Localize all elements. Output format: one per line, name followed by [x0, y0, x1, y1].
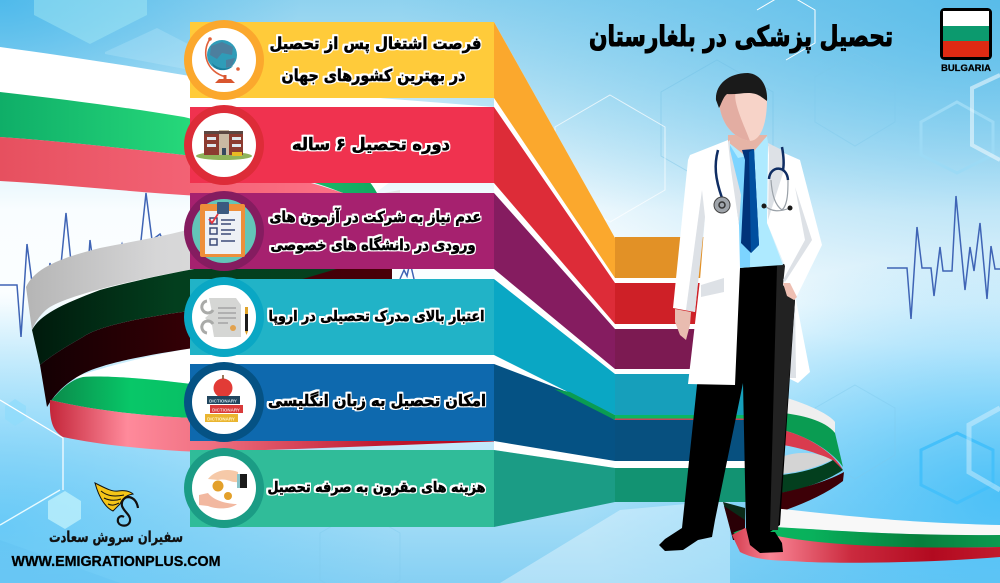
banner 5: English-language study: [184, 362, 750, 461]
icon: clipboard: [200, 202, 245, 257]
title: تحصیل پزشکی در بلغارستان: [589, 20, 893, 53]
label 4: اعتبار بالای مدرک تحصیلی در اروپا: [268, 309, 484, 325]
banner 2: six-year course: [184, 105, 750, 324]
trousers: [659, 264, 797, 553]
label 1: در بهترین کشورهای جهان: [282, 66, 466, 86]
tie: [741, 149, 759, 253]
doctor figure: [659, 73, 822, 553]
icon: certificate and pen: [202, 298, 248, 337]
label 5: امکان تحصیل به زبان انگلیسی: [268, 391, 486, 410]
banner 4: degree validity: [184, 277, 750, 415]
head: [716, 73, 768, 165]
hands: [675, 309, 691, 340]
label 6: هزینه های مقرون به صرفه تحصیل: [268, 480, 486, 496]
icon: hands and coins: [199, 470, 247, 508]
flag ribbon: right loop: [723, 398, 1000, 563]
white backing behind 3D banner sides: [494, 22, 752, 468]
white coat: [673, 140, 822, 385]
label 2: دوره تحصیل ۶ ساله: [292, 135, 450, 155]
flag caption: BULGARIA: [941, 63, 991, 74]
logo wordmark: سفیران سروش سعادت: [49, 528, 183, 546]
website address: WWW.EMIGRATIONPLUS.COM: [12, 553, 220, 570]
icon: dictionaries and apple: DICTIONARY: [209, 398, 237, 404]
ring 2: [184, 105, 264, 185]
icon: winged swan: [49, 483, 183, 546]
banner 1: job opportunity: [184, 20, 750, 278]
flag ribbon: upper left: [0, 47, 494, 196]
label 3: [270, 208, 482, 254]
icon: school building: [196, 130, 252, 160]
ring 4: [184, 277, 264, 357]
icon: dictionaries and apple: DICTIONARY: [212, 408, 240, 412]
stethoscope: [714, 147, 792, 213]
ring 5: [184, 362, 264, 442]
icon: dictionaries and apple: [205, 375, 243, 422]
label 1: [270, 34, 482, 86]
ECG line right: [887, 196, 1000, 319]
label 3: عدم نیاز به شرکت در آزمون های: [270, 208, 482, 226]
logo: [12, 483, 220, 570]
flag ribbon: lower left loop: [26, 190, 505, 452]
shirt: [728, 136, 783, 268]
icon: dictionaries and apple: DICTIONARY: [207, 416, 235, 422]
ring 1: [184, 20, 264, 100]
coat back panel: [778, 290, 810, 383]
banner 6: affordable costs: [184, 448, 750, 528]
ring 6: [184, 448, 264, 528]
ring 3: [184, 191, 264, 271]
Bulgarian flag badge: [941, 10, 991, 74]
ECG line left: [0, 193, 414, 361]
label 1: فرصت اشتغال پس از تحصیل: [270, 34, 482, 54]
label 3: ورودی در دانشگاه های خصوصی: [270, 236, 476, 254]
banner 3: no entrance exam: [184, 191, 750, 369]
icon: globe: [206, 37, 240, 83]
